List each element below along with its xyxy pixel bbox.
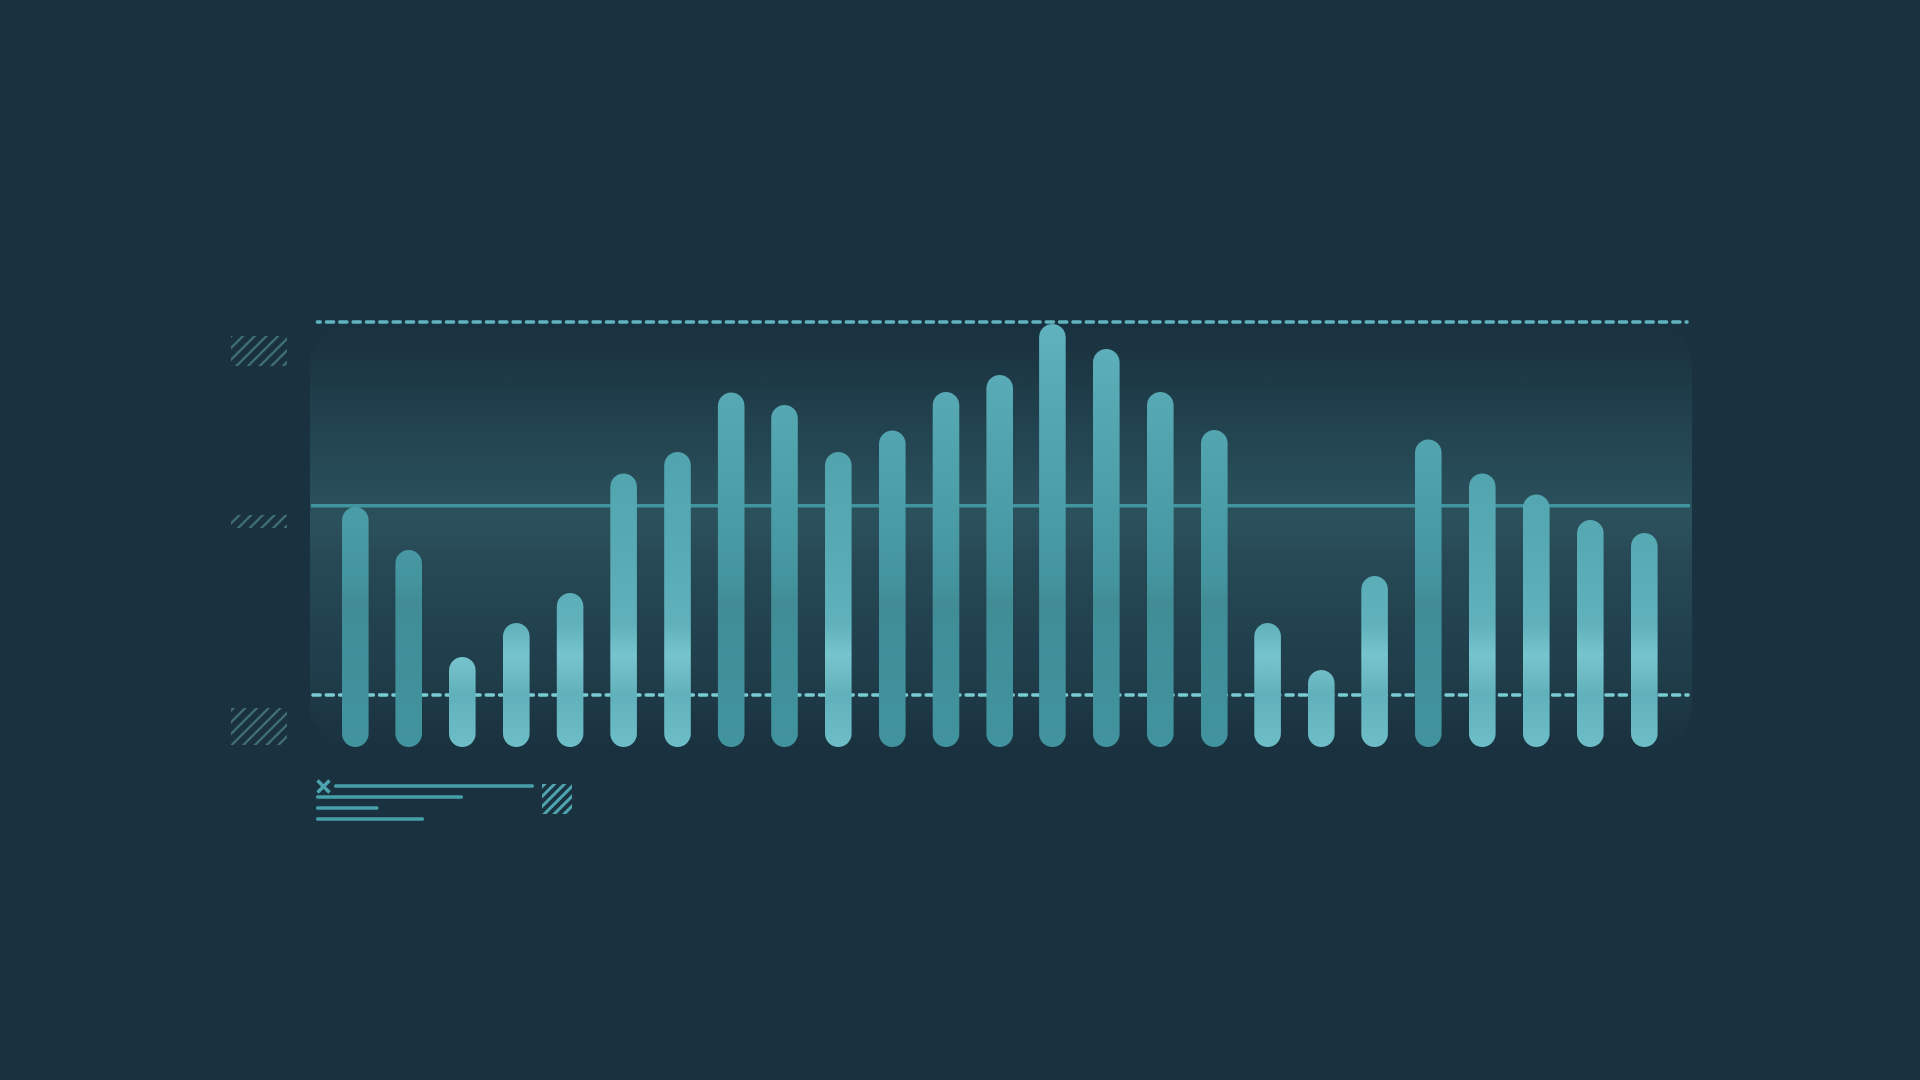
legend lines: placeholder text rows (316, 784, 534, 821)
reference line: lower dashed limit (313, 693, 1688, 697)
panel: chart background band (310, 322, 1692, 750)
reference line: upper dashed limit (318, 320, 1687, 324)
hatched marker: lower axis (231, 708, 287, 745)
icon: close cross (318, 780, 330, 792)
legend block (316, 780, 572, 821)
hatched marker: middle axis (231, 515, 287, 528)
bar chart: 25 rounded bars (342, 324, 1658, 747)
hatched marker: upper axis (231, 336, 287, 366)
reference line: solid mean (311, 504, 1690, 508)
hatched legend swatch (542, 784, 572, 814)
